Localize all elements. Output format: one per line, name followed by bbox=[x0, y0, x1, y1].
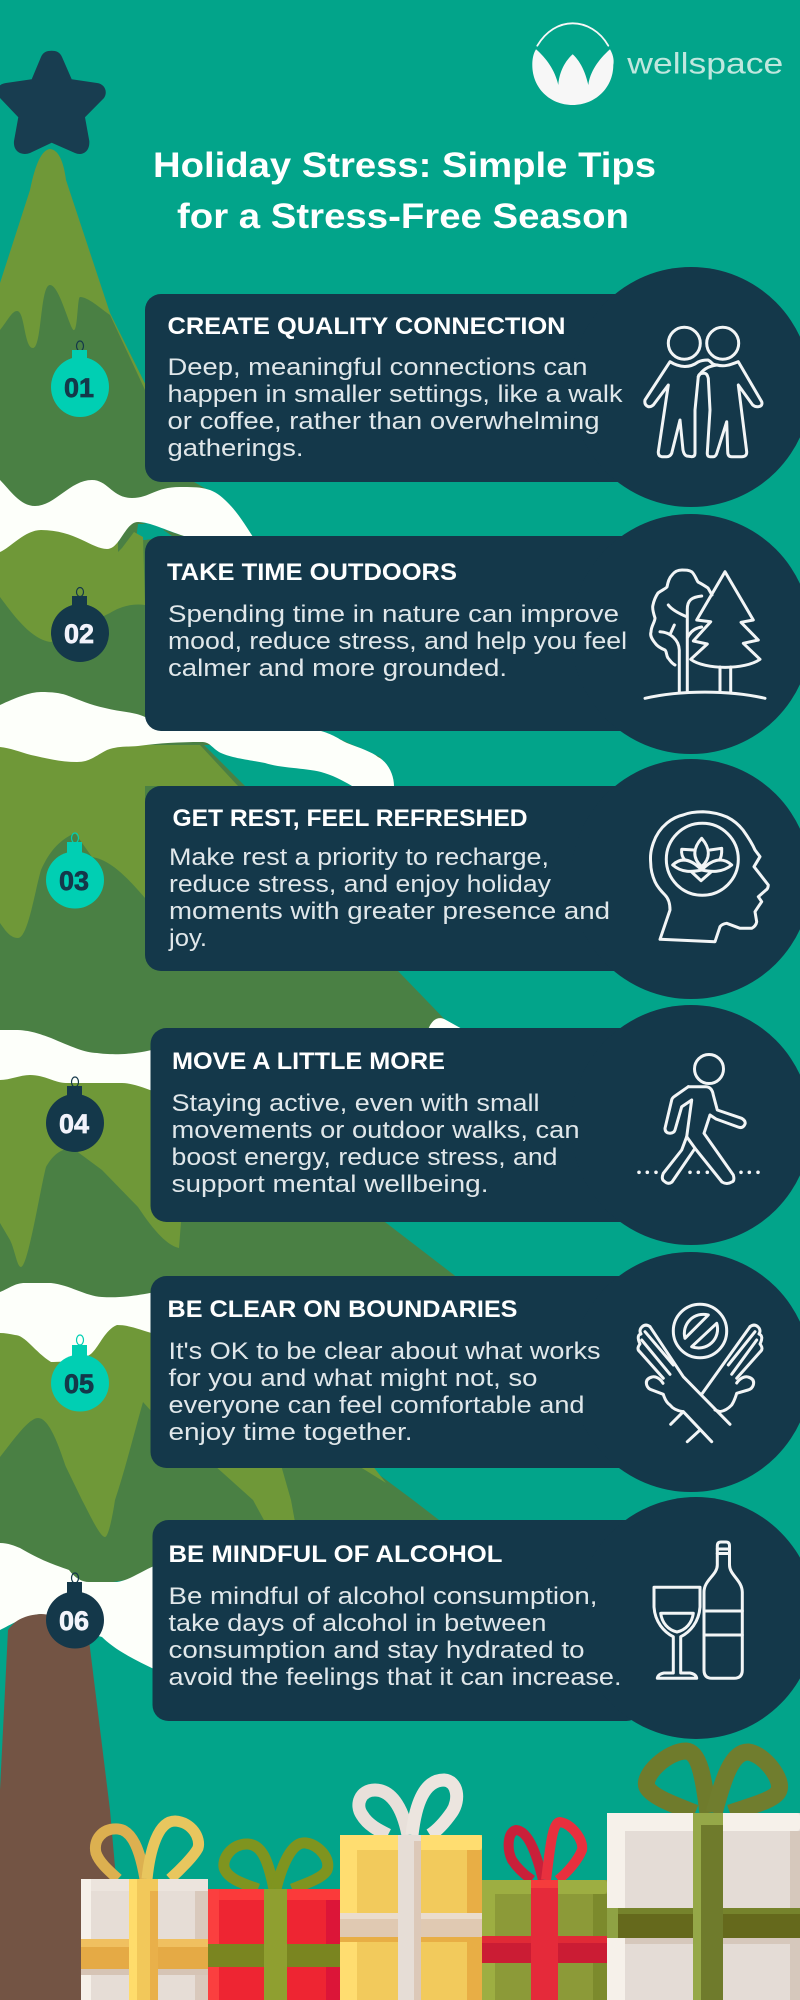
tree tier 1 bbox=[0, 149, 225, 520]
body text: take days of alcohol in between bbox=[168, 1610, 546, 1637]
title bbox=[153, 146, 656, 236]
snow band 2 bbox=[0, 692, 394, 786]
ornament 03: 03 bbox=[59, 866, 89, 896]
body text: calmer and more grounded. bbox=[168, 655, 507, 682]
body text: boost energy, reduce stress, and bbox=[172, 1144, 558, 1171]
body text: It's OK to be clear about what works bbox=[168, 1338, 600, 1365]
body text bbox=[168, 1338, 600, 1446]
small snow bump bbox=[428, 1018, 464, 1030]
title: for a Stress-Free Season bbox=[177, 197, 629, 236]
christmas tree illustration bbox=[0, 149, 480, 2000]
tree trunk bbox=[0, 1614, 130, 2000]
body text: reduce stress, and enjoy holiday bbox=[169, 871, 552, 898]
gift 1: white box yellow ribbon bbox=[81, 1821, 208, 2000]
icon: walking person bbox=[637, 1054, 760, 1184]
icon: wine bottle and glass bbox=[654, 1542, 742, 1678]
gift 3: yellow box white ribbon bbox=[340, 1780, 482, 2000]
ornament 02 bbox=[51, 588, 109, 662]
body text: Deep, meaningful connections can bbox=[168, 354, 588, 381]
ornament 01: 01 bbox=[64, 373, 94, 403]
body text: for you and what might not, so bbox=[168, 1365, 538, 1392]
body text: gatherings. bbox=[168, 435, 304, 462]
heading: TAKE TIME OUTDOORS bbox=[167, 559, 457, 586]
body text: support mental wellbeing. bbox=[172, 1171, 488, 1198]
panel: tip 4 move a little more bbox=[150, 1005, 800, 1245]
icon: two people bbox=[645, 327, 762, 457]
logo bbox=[532, 23, 783, 105]
body text: enjoy time together. bbox=[168, 1419, 412, 1446]
ornament 05: 05 bbox=[64, 1369, 94, 1399]
gift 2: red box green ribbon bbox=[208, 1843, 340, 2000]
ornament 02: 02 bbox=[64, 619, 94, 649]
panel: tip 1 create quality connection bbox=[145, 267, 800, 507]
body text: joy. bbox=[168, 925, 207, 952]
heading: BE MINDFUL OF ALCOHOL bbox=[168, 1541, 502, 1568]
panel: tip 3 get rest feel refreshed bbox=[145, 759, 800, 999]
star tree topper bbox=[0, 51, 106, 154]
snow band 1 bbox=[0, 480, 255, 552]
panel: tip 2 take time outdoors bbox=[145, 514, 800, 754]
ornament 01 bbox=[51, 341, 109, 417]
ornament 04 bbox=[46, 1077, 104, 1152]
logo wordmark: wellspace bbox=[626, 47, 783, 80]
body text: consumption and stay hydrated to bbox=[168, 1637, 584, 1664]
body text bbox=[168, 601, 627, 682]
body text: Make rest a priority to recharge, bbox=[169, 844, 549, 871]
body text: Staying active, even with small bbox=[172, 1090, 540, 1117]
body text: Spending time in nature can improve bbox=[168, 601, 619, 628]
body text: or coffee, rather than overwhelming bbox=[168, 408, 600, 435]
ornament 06: 06 bbox=[59, 1606, 89, 1636]
body text: Be mindful of alcohol consumption, bbox=[168, 1583, 598, 1610]
heading: BE CLEAR ON BOUNDARIES bbox=[168, 1296, 518, 1323]
tree tier 2 bbox=[0, 500, 392, 775]
body text: happen in smaller settings, like a walk bbox=[168, 381, 623, 408]
tree tier 5 bbox=[0, 1295, 439, 1600]
panel: tip 5 be clear on boundaries bbox=[150, 1252, 800, 1492]
gifts row bbox=[81, 1751, 800, 2000]
logo mark bbox=[532, 23, 614, 105]
heading: GET REST, FEEL REFRESHED bbox=[172, 805, 528, 832]
heading: CREATE QUALITY CONNECTION bbox=[168, 313, 566, 340]
snow band 3 bbox=[0, 1030, 155, 1092]
body text bbox=[168, 354, 623, 462]
body text bbox=[172, 1090, 580, 1198]
body text bbox=[168, 844, 610, 952]
title: Holiday Stress: Simple Tips bbox=[153, 146, 656, 185]
body text bbox=[168, 1583, 622, 1691]
icon: crossed hands and stop sign bbox=[638, 1304, 762, 1442]
body text: avoid the feelings that it can increase. bbox=[168, 1664, 622, 1691]
tree tier 4 bbox=[0, 1040, 480, 1300]
ornament 04: 04 bbox=[59, 1109, 89, 1139]
ornament 05 bbox=[51, 1335, 109, 1412]
icon: trees bbox=[645, 570, 765, 698]
body text: mood, reduce stress, and help you feel bbox=[168, 628, 627, 655]
body text: moments with greater presence and bbox=[169, 898, 610, 925]
heading: MOVE A LITTLE MORE bbox=[172, 1048, 445, 1075]
snow band 4 bbox=[0, 1283, 155, 1362]
tree tier 3 bbox=[0, 740, 455, 1060]
body text: movements or outdoor walks, can bbox=[172, 1117, 580, 1144]
snow band 5 bbox=[0, 1543, 156, 1670]
gift 5: white box green ribbon bbox=[607, 1751, 800, 2000]
ornament 06 bbox=[46, 1573, 104, 1648]
panel: tip 6 be mindful of alcohol bbox=[152, 1497, 800, 1739]
gift 4: green box red ribbon bbox=[482, 1822, 607, 2000]
icon: head with lotus bbox=[650, 812, 768, 942]
ornament 03 bbox=[46, 833, 104, 908]
body text: everyone can feel comfortable and bbox=[168, 1392, 584, 1419]
